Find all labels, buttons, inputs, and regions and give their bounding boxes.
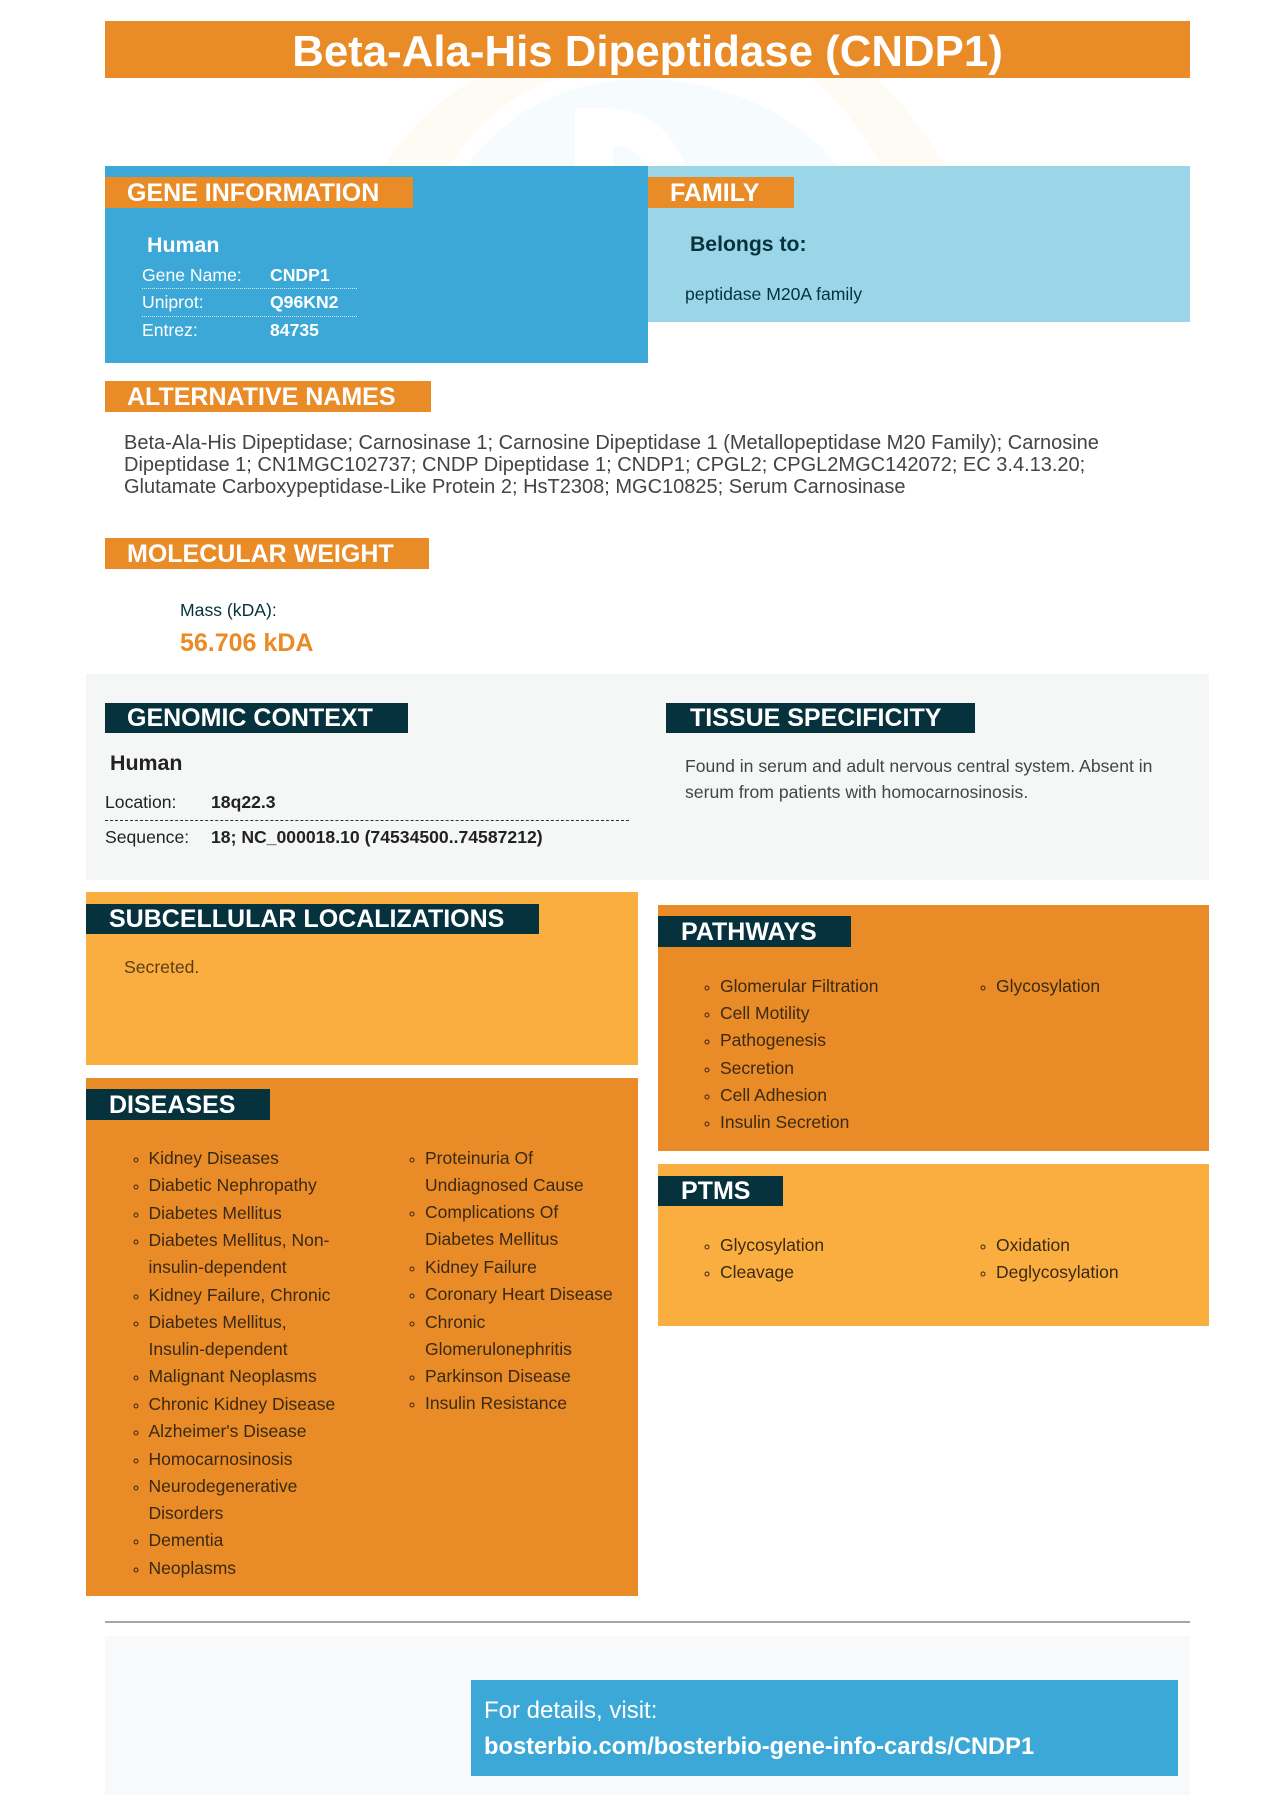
diseases list column 1: Diabetes Mellitus, (148, 1312, 287, 1332)
diseases list column 1: Homocarnosinosis (148, 1449, 292, 1469)
title banner (105, 21, 1190, 78)
details URL: bosterbio.com/bosterbio-gene-info-cards/CNDP1 (484, 1734, 1034, 1760)
heading: genomic context: GENOMIC CONTEXT (127, 704, 373, 732)
panel: diseases (86, 1078, 638, 1596)
family text: peptidase M20A family (685, 284, 862, 304)
panel: footer (105, 1636, 1190, 1795)
panel: subcellular localizations (86, 892, 638, 1065)
mass label: Mass (kDA): (180, 600, 277, 620)
sequence row: 18; NC_000018.10 (74534500..74587212) (211, 827, 543, 847)
pathways list: Glomerular Filtration (720, 976, 879, 996)
mass value: 56.706 kDA (180, 629, 313, 657)
panel: family (648, 166, 1190, 322)
alternative names text: Beta-Ala-His Dipeptidase; Carnosinase 1; Carnosine Dipeptidase 1 (Metallopeptidase M20 Family); Carnosine (124, 432, 1099, 454)
heading: subcellular localizations: SUBCELLULAR LOCALIZATIONS (109, 905, 504, 933)
tissue specificity text (685, 756, 1152, 802)
heading: tissue specificity: TISSUE SPECIFICITY (690, 704, 941, 732)
pathways list (704, 976, 1100, 1132)
uniprot row: Q96KN2 (270, 292, 338, 312)
panel: PTMs (658, 1164, 1209, 1326)
diseases list column 1: Kidney Failure, Chronic (148, 1285, 330, 1305)
belongs to label: Belongs to: (690, 233, 807, 256)
diseases list column 2: Parkinson Disease (425, 1366, 571, 1386)
panel: genomic context and tissue specificity (86, 674, 1209, 880)
diseases list column 2: Undiagnosed Cause (425, 1175, 584, 1195)
diseases list column 1: Chronic Kidney Disease (148, 1394, 335, 1414)
diseases list column 2: Chronic (425, 1312, 485, 1332)
pathways list: Pathogenesis (720, 1030, 826, 1050)
alternative names text: Glutamate Carboxypeptidase-Like Protein 2; HsT2308; MGC10825; Serum Carnosinase (124, 476, 906, 498)
diseases list column 1: Alzheimer's Disease (148, 1421, 306, 1441)
heading: PTMs (658, 1176, 783, 1206)
diseases list column 1 (134, 1148, 335, 1578)
gene name row (142, 265, 330, 285)
panel: genomic context and tissue specificity: 18q22.3 (211, 792, 276, 812)
uniprot row: Uniprot: (142, 292, 204, 312)
gene name row: CNDP1 (270, 265, 330, 285)
diseases list column 2: Diabetes Mellitus (425, 1229, 558, 1249)
diseases list column 2 (410, 1148, 613, 1413)
PTMs list: Cleavage (720, 1262, 794, 1282)
title banner: Beta-Ala-His Dipeptidase (CNDP1) (292, 27, 1003, 76)
location row: Location: (105, 792, 176, 812)
callout: details link (471, 1680, 1178, 1776)
heading: pathways (658, 916, 851, 947)
species label: Human (110, 751, 182, 775)
diseases list column 2: Proteinuria Of (425, 1148, 533, 1168)
PTMs list: Deglycosylation (996, 1262, 1119, 1282)
diseases list column 1: Neoplasms (148, 1558, 236, 1578)
sequence row: Sequence: (105, 827, 189, 847)
diseases list column 2: Kidney Failure (425, 1257, 537, 1277)
details label: For details, visit: (484, 1697, 657, 1724)
diseases list column 1: insulin-dependent (148, 1257, 287, 1277)
PTMs list: Oxidation (996, 1234, 1070, 1254)
subcellular text: Secreted. (124, 957, 199, 977)
species label: Human (147, 232, 220, 256)
entrez row (142, 320, 319, 340)
diseases list column 2: Insulin Resistance (425, 1393, 567, 1413)
PTMs list (704, 1234, 1119, 1282)
alternative names text (124, 432, 1099, 498)
diseases list column 1: Disorders (148, 1503, 223, 1523)
gene name row: Gene Name: (142, 265, 242, 285)
heading: molecular weight: MOLECULAR WEIGHT (127, 540, 394, 568)
alternative names text: Dipeptidase 1; CN1MGC102737; CNDP Dipeptidase 1; CNDP1; CPGL2; CPGL2MGC142072; EC 3.4.13.20; (124, 454, 1085, 476)
heading: diseases (86, 1089, 270, 1120)
panel: pathways (658, 905, 1209, 1151)
diseases list column 2: Coronary Heart Disease (425, 1284, 613, 1304)
PTMs list: Glycosylation (720, 1234, 824, 1254)
diseases list column 1: Neurodegenerative (148, 1476, 297, 1496)
diseases list column 1: Diabetes Mellitus (148, 1203, 282, 1223)
pathways list: Cell Motility (720, 1003, 809, 1023)
diseases list column 1: Dementia (148, 1530, 223, 1550)
diseases list column 1: Diabetes Mellitus, Non- (148, 1230, 329, 1250)
watermark logo (384, 78, 944, 166)
heading: alternative names: ALTERNATIVE NAMES (127, 383, 396, 411)
tissue specificity text: Found in serum and adult nervous central system. Absent in (685, 756, 1152, 776)
location row (105, 792, 276, 812)
pathways list: Secretion (720, 1058, 794, 1078)
heading: gene information: GENE INFORMATION (127, 179, 379, 207)
panel: gene information (105, 166, 648, 363)
heading: diseases: DISEASES (109, 1091, 235, 1119)
heading: family: FAMILY (670, 179, 759, 207)
diseases list column 2: Glomerulonephritis (425, 1339, 572, 1359)
diseases list column 1: Insulin-dependent (148, 1339, 288, 1359)
pathways list: Insulin Secretion (720, 1112, 849, 1132)
diseases list column 1: Kidney Diseases (148, 1148, 279, 1168)
entrez row: 84735 (270, 320, 319, 340)
heading: PTMs: PTMS (681, 1177, 750, 1205)
diseases list column 1: Diabetic Nephropathy (148, 1175, 317, 1195)
heading: pathways: PATHWAYS (681, 918, 817, 946)
diseases list column 2: Complications Of (425, 1202, 558, 1222)
entrez row: Entrez: (142, 320, 198, 340)
diseases list column 1: Malignant Neoplasms (148, 1366, 317, 1386)
pathways list: Glycosylation (996, 976, 1100, 996)
pathways list: Cell Adhesion (720, 1085, 827, 1105)
tissue specificity text: serum from patients with homocarnosinosis. (685, 782, 1028, 802)
heading: family (648, 177, 794, 208)
uniprot row (142, 292, 338, 312)
